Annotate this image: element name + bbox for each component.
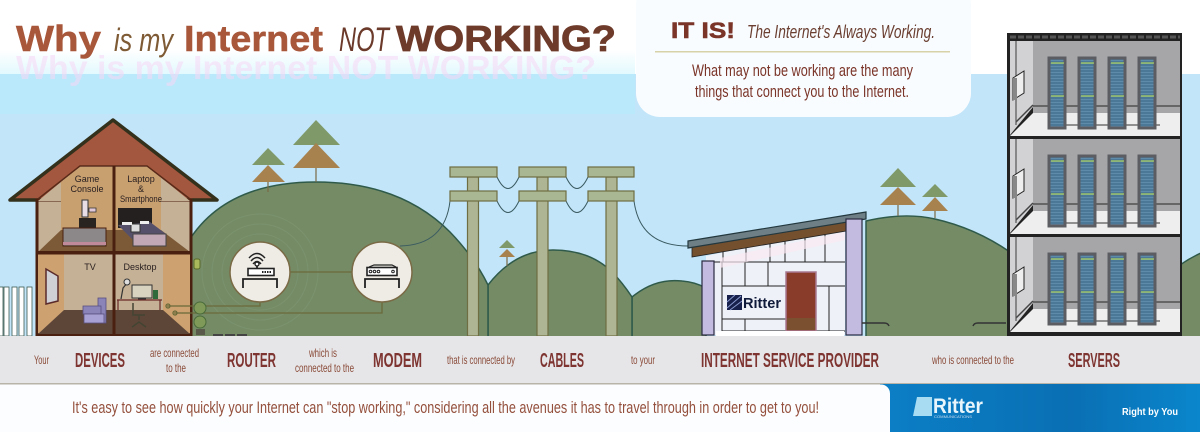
- label: TV: TV: [84, 262, 96, 272]
- strip connectors: who is connected to the: [931, 353, 1014, 367]
- callout: it is: [636, 0, 971, 117]
- label: laptop and smartphone: Laptop: [127, 174, 155, 184]
- title: WORKING?: [396, 18, 616, 59]
- utility poles: [450, 167, 634, 336]
- fence: [0, 287, 32, 336]
- game console and couch: [63, 200, 106, 246]
- title: Why: [16, 18, 101, 59]
- title: NOT: [339, 21, 391, 59]
- tagline: Right by You: [1122, 406, 1178, 418]
- house: Console: [70, 184, 104, 194]
- strip connectors: connected to the: [295, 361, 354, 375]
- title: [16, 18, 616, 59]
- strip labels: SERVERS: [1068, 350, 1120, 372]
- data center servers building: [1007, 33, 1182, 336]
- pillars: [846, 219, 862, 335]
- hills: [188, 182, 1200, 337]
- strip connectors: that is connected by: [447, 353, 515, 367]
- sky background: [0, 74, 1200, 337]
- roof: [10, 120, 217, 200]
- strip connectors: to your: [631, 353, 655, 367]
- desk with computer: [117, 279, 162, 327]
- callout text: What may not be working are the many: [692, 61, 913, 80]
- title: Internet: [184, 18, 323, 59]
- cables: [400, 177, 688, 246]
- icon: router: [243, 254, 277, 288]
- text: Why is my Internet NOT WORKING?: [16, 49, 596, 86]
- footer sentence: It's easy to see how quickly your Internet can "stop working," considering all the avenues it has to travel through in order to get to you!: [72, 398, 819, 417]
- wifi signal rings: [202, 214, 318, 330]
- flow strip: [0, 336, 1200, 384]
- strip labels: INTERNET SERVICE PROVIDER: [701, 350, 879, 372]
- internet service provider building: [688, 212, 866, 336]
- it is heading: IT IS!: [671, 18, 735, 43]
- armchair: [83, 298, 106, 323]
- label: desktop: Desktop: [123, 262, 157, 272]
- strip labels: CABLES: [540, 350, 584, 372]
- router circle: [230, 242, 290, 302]
- subhead: The Internet's Always Working.: [747, 22, 935, 42]
- building logo: Ritter: [743, 295, 781, 312]
- label: game console: Game: [75, 174, 99, 184]
- strip connectors: which is: [308, 346, 337, 360]
- trees: [252, 120, 948, 266]
- door: [786, 272, 816, 331]
- ritter logo: [913, 395, 983, 419]
- ritter logo: Ritter: [933, 395, 983, 418]
- bed with laptop: [118, 208, 166, 246]
- ground cables to servers: [862, 323, 1006, 326]
- strip labels: ROUTER: [227, 350, 276, 372]
- strip labels: [75, 350, 1120, 372]
- strip labels: DEVICES: [75, 350, 125, 372]
- modem circle: [352, 242, 412, 302]
- footer bar: [0, 384, 1200, 432]
- house: [10, 120, 217, 335]
- house walls: [37, 200, 191, 335]
- roof beam: [692, 221, 846, 257]
- ritter logo: COMMUNICATIONS: [934, 415, 973, 419]
- building logo: [727, 295, 781, 312]
- house: Smartphone: [120, 194, 162, 204]
- strip connectors: Your: [34, 353, 49, 367]
- icon: modem: [365, 265, 399, 288]
- strip connectors: are connected: [150, 346, 199, 360]
- callout: it is: things that connect you to the Internet.: [695, 82, 909, 101]
- title: is my: [114, 22, 175, 58]
- house: &: [138, 184, 144, 194]
- strip labels: MODEM: [373, 350, 422, 372]
- connection wires: [166, 272, 382, 315]
- roof slab: [688, 212, 866, 248]
- strip connectors: [34, 346, 1014, 375]
- strip connectors: to the: [166, 361, 186, 375]
- shrubs and meter: [194, 259, 247, 335]
- wall TV: [46, 269, 58, 304]
